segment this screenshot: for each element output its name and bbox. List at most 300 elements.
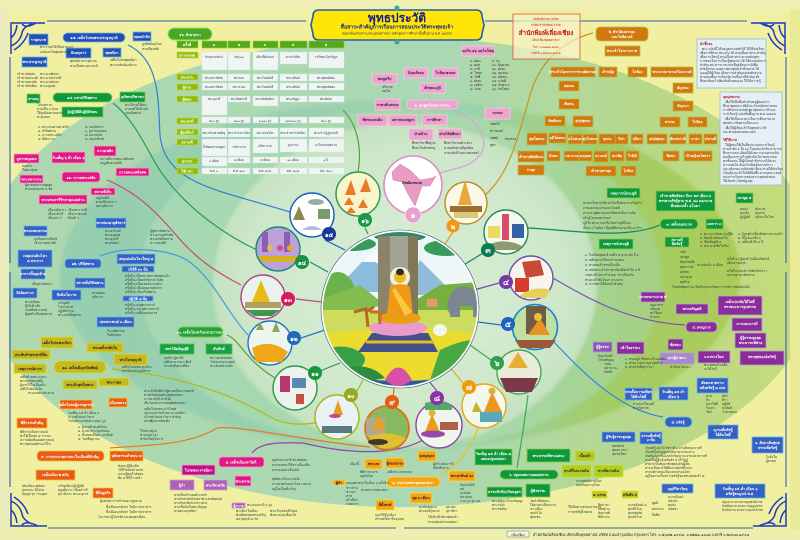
panel 8: magenta and lilac tree: ทรงทำศาสนกิจเหล่าพระสงฆ์เผยแผ่ — [174, 497, 222, 501]
panel 15: blue tree top left: พระราหุลได้เป็นสามเณร — [40, 43, 74, 50]
panel 3: dark green tree: ในสมัยพุทธกาล เป็นภิกษุแรกกับพระราชาธิราชอันดับหนึ่ง — [672, 283, 750, 290]
panel 13: magenta tree: สถูปเจดีย์ — [96, 196, 109, 200]
panel 10: green tree by medallion 12: พระวินัยบัญญัติ — [165, 346, 189, 352]
panel 6: green tree bottom right: ทางที่ไม่ควรเดิน — [564, 468, 590, 473]
panel 9: orange tree: เศรษฐีอนาถบิณฑิก — [144, 419, 170, 423]
panel 6: green tree bottom right: พระธรรมที่ทรงแสดง — [533, 453, 565, 458]
panel 2: orange family tree — [518, 27, 717, 176]
panel 9: orange tree: ตำบลอุรุเวลา — [140, 433, 158, 438]
panel 5: blue tree bottom right: ธีร — [706, 398, 710, 402]
panel 6: green tree bottom right: พบธรรม — [652, 507, 664, 511]
panel 15: blue tree top left: ทรงเตือนสติ — [142, 46, 159, 51]
panel 11: olive tree: ทรงโปรดรับนมัสการ — [122, 368, 151, 373]
panel 7: amber tree: ทูต ๓ เดือน — [412, 495, 430, 501]
panel 9: orange tree: เสด็จโปรดพระเจ้าโกศล — [144, 405, 176, 411]
panel 7: amber tree: ได้เข้าเฝ้าพระพุทธเจ้า — [427, 515, 458, 520]
heading: section 16 — [168, 28, 212, 40]
panel 4: purple tree: เสด็จประทับใต้โพธิ์ — [725, 298, 756, 304]
panel 15: blue tree top left: ลูกศิษย์อนุโลม — [142, 41, 162, 47]
panel 2: orange family tree: เจ้าชายราหุล — [591, 168, 611, 174]
panel 5: blue tree bottom right: พุทธมามกะ — [612, 448, 628, 453]
panel 6: green tree bottom right: มรรคมีองค์ ๘ — [628, 503, 647, 507]
panel 6: green tree bottom right: ให้เห็นทางสายกลางชนะ — [568, 503, 602, 509]
panel 16: council table: พระเจ้ากาลาโศก — [228, 131, 250, 135]
panel 6: green tree bottom right: อริยสัจ ๔ — [623, 492, 637, 497]
panel 12: blue tree: พระอุบาลี — [105, 237, 118, 242]
panel 12: blue tree: สวนมัลละ — [92, 291, 106, 295]
panel 8: magenta and lilac tree: ฟังเสียงเพลงสรรเสริญ — [236, 513, 266, 517]
panel 13: magenta tree: เมืองกุสินารา — [48, 207, 66, 213]
panel 12: blue tree: ในวงศ์ศากยะ — [107, 329, 126, 333]
panel 13: magenta tree: ปิปผลิ ๆ — [68, 216, 79, 221]
panel 4: purple tree: มารและบารมี — [736, 321, 758, 326]
panel 16: council table: ใช้เวลา — [181, 168, 193, 174]
panel 3: dark green tree: ๑. ในเมืองพุทธเจ้าเสด็จ ทรงประทับ ปี ๑ — [585, 251, 639, 258]
panel 9: orange tree — [17, 388, 194, 520]
panel 12: blue tree: ผู้สู่พระนิพพาน — [150, 229, 171, 233]
panel 11: olive tree: ทรงโปรดญาติ — [120, 357, 142, 363]
panel 7: amber tree: บอกให้รู้ถูกต้อง — [375, 513, 396, 517]
panel 1: pink topic tree: มหาชนบทสูตร — [392, 118, 414, 123]
panel 10: green tree by medallion 12 — [160, 327, 235, 368]
badge 13 — [281, 292, 295, 306]
panel 1: pink topic tree: แพศย์ — [490, 136, 498, 140]
note panel: objectives: การศึกษาตามหลักสูตรพุทธประวัติ และ — [723, 108, 776, 113]
panel 14: green tree: ๕. ปลงสังขาร — [85, 125, 104, 129]
note panel: objectives: ให้ผู้สอนใช้เป็นสื่อประกอบการเรียนรู้ — [725, 141, 775, 147]
panel 1: pink topic tree: กษัตริย์ — [490, 122, 500, 126]
panel 12: blue tree: ครั้งที่ ๓ เสด็จออกผนวช — [125, 309, 158, 315]
panel 15: blue tree top left: เจ้าชายเทวทัต — [17, 80, 37, 84]
panel 10: green tree by medallion 12: พระอินทร์เนรมิต — [210, 364, 233, 368]
panel 15: blue tree top left: พุทธดำรัส — [134, 34, 151, 40]
panel 12: blue tree: ครั้งที่ ๑ เมื่อพระสัมมาสัมพุทธเจ้า — [125, 273, 170, 279]
panel 5: blue tree bottom right: ธรรมจักรหมุนเป็นวงกลมรอบโลก — [645, 468, 690, 475]
badge 10 — [344, 388, 358, 402]
panel 2: orange family tree: กัญจนา — [677, 103, 689, 109]
panel 16: council table: ผู้ตอบ — [183, 96, 192, 102]
panel 11: olive tree: พระราหุล — [107, 380, 121, 386]
heading: section 15 — [63, 33, 125, 42]
panel 9: orange tree: เจริญเดือน ผู้ปฏิบัติ — [58, 483, 84, 488]
badge 13: ๑๓ — [284, 298, 292, 304]
panel 14: green tree: ให้ถูกต้องตามธรรม — [37, 111, 64, 115]
panel 3: dark green tree: ๒. มีรู้ตนเองถึง ๖ — [738, 236, 761, 240]
badge 8 — [430, 391, 444, 405]
panel 12: blue tree: พระสงฆ์ทั้งหลาย — [150, 236, 173, 241]
panel 10: green tree by medallion 12: ๑๐. เสด็จโปรดวันมหาปวารณา — [177, 328, 224, 334]
panel 8: magenta and lilac tree: พระเจ้าปเสนทิโกศล — [270, 508, 297, 513]
panel 16: council table: ๓ เดือน — [209, 158, 219, 163]
panel 16: council table: ผู้อุปถัมภ์ — [180, 130, 194, 136]
panel 11: olive tree: ผู้ยากไร้ในเมืองนั้น — [20, 382, 46, 387]
panel 14: green tree: ตามเป็น ๓ ส่วน — [37, 105, 59, 111]
panel 8: magenta and lilac tree: พระธิดาในเมือง — [236, 508, 258, 513]
panel 13: magenta tree: ตามเมืองต่าง ๆ — [96, 199, 117, 205]
panel 3: dark green tree: ครั้งที่ ๒ ทรงนิวาสพักชั่วคราว — [727, 268, 767, 273]
panel 7: amber tree: ชาวนา — [346, 490, 356, 494]
panel 7: amber tree: สร้างศรัทธาในชุมชน — [375, 517, 405, 522]
medallion 1: map of India: มัชฌิมชนบท — [402, 180, 423, 185]
panel 2: orange family tree: พระนางมายาเทวีและวงศ์ — [652, 69, 692, 74]
panel 3: dark green tree: ผลการ ๓ — [708, 222, 722, 226]
note panel: objectives: เพื่อให้ผู้เรียนเข้าใจพุทธประวัติ — [725, 125, 766, 131]
panel 16: council table: พระมหินท์ — [286, 76, 300, 80]
publisher stamp: บริษัท สำนักพิมพ์ จำกัด — [531, 23, 561, 27]
panel 12: blue tree: ไม่ประมาท — [57, 305, 73, 309]
panel 3: dark green tree: ที่ตรัสรู้ — [671, 241, 682, 247]
panel 12: blue tree: ปฏิบัติธรรม — [58, 309, 74, 313]
panel 3: dark green tree: ๓. ทรงพบเจ้าชายเมืองนั้น — [585, 262, 621, 267]
panel 15: blue tree top left: นันทกุมาร — [71, 50, 86, 56]
panel 6: green tree bottom right: พุทธชน — [530, 515, 541, 520]
note panel: introduction: คำสอนเพื่อการเรียนรู้ตามเนื้อหาที่สำคัญ ทั้ง — [700, 74, 760, 79]
panel 5: blue tree bottom right: วิตก — [706, 410, 712, 414]
panel 5: blue tree bottom right: หลังตรัสรู้ ๗ แห่ง — [700, 385, 726, 391]
heading: section 11 — [54, 361, 106, 373]
panel 9: orange tree: ที่มีอยู่จริง — [95, 490, 111, 496]
panel 2: orange family tree: เจ้าหญิง — [602, 69, 615, 75]
panel 7: amber tree: ผู้นำ — [336, 480, 342, 486]
heading: section 1 — [407, 100, 458, 109]
panel 5: blue tree bottom right: วันเพ็ญ ๑๕ ค่ำ เดือน ๖ — [722, 485, 758, 492]
panel 14: green tree: ก่อนนิพพาน — [125, 111, 142, 115]
panel 5: blue tree bottom right: ใต้ต้นโพธิ์ — [631, 394, 647, 399]
badge 7 — [462, 380, 476, 394]
panel 6: green tree bottom right: อธิษฐาน — [598, 507, 611, 511]
medallion 12 — [248, 321, 292, 365]
panel 2: orange family tree: อานนท์ — [595, 153, 607, 158]
panel 4: purple tree: ๑. ทรงอยู่ป่าลึกพระเจ้าแผ่นดิน — [625, 357, 667, 361]
panel 9: orange tree: ถวายเวฬุวัน สวนไผ่ — [144, 396, 171, 402]
badge 11: ๑๑ — [311, 372, 319, 378]
panel 16: council table: พระพุทธทัตตะ — [317, 76, 336, 81]
panel 12: blue tree: ถูกต้องตามที่ตรัส — [34, 236, 57, 241]
panel 4: purple tree: พระมารแพ้พ่าย — [739, 340, 762, 345]
panel 16: council table: จารึกพระไตรปิฎก — [315, 55, 338, 59]
panel 1: pink topic tree: ๑๓. อัสสกะ — [492, 75, 508, 79]
panel 2: orange family tree: สุทโธทนะ — [529, 136, 545, 142]
panel 16: council table: พระมหากัสสป — [205, 76, 223, 80]
panel 12: blue tree: ๘ ประการ — [27, 258, 43, 263]
panel 3: dark green tree: ๒. ปิดหน้าหนีออกไป — [700, 236, 728, 240]
panel 3: dark green tree: สุทธาวาส — [680, 265, 693, 270]
publisher logo and footer — [507, 531, 750, 538]
panel 3: dark green tree: ภูมิใจ พระมารดาถึงวันประสูติที่ ๑๕ — [583, 220, 631, 225]
panel 5: blue tree bottom right: อยู่ในธรรมเรื่องการตรัสรู้ของพระพุทธเจ้า ๕ — [645, 473, 705, 479]
panel 7: amber tree: ญาติกลุ่มแรก — [419, 505, 437, 510]
panel 3: dark green tree: ผู้ปฏิบัติ — [740, 215, 750, 219]
heading: section 5: ๕. ตรัสรู้ — [671, 420, 685, 426]
panel 16: council table: วัตถุ ๑๐ — [234, 55, 244, 60]
panel 10: green tree by medallion 12: ประทับยืนตรงที่นั่น — [164, 363, 190, 368]
note panel: objectives: ทุกขั้นตอน ให้ผู้เรียนทำกิจกรรมได้ตาม — [723, 158, 776, 164]
panel 13: magenta tree: ผู้ทรงคุณธรรมสูงสุด — [25, 183, 52, 188]
medallion 13 — [241, 275, 285, 319]
panel 16: council table: พระอริฏฐะ — [286, 97, 300, 101]
panel 12: blue tree: พระสุภัททะ — [25, 300, 41, 305]
badge 2: ๒ — [451, 224, 456, 231]
badge 9: ๙ — [389, 398, 395, 407]
medallion 10 — [315, 395, 359, 439]
panel 5: blue tree bottom right: ๑. สัมมาสัมพุทธ — [755, 440, 781, 446]
panel 9: orange tree: เดินเดือน สุทัตตะ — [22, 483, 46, 489]
panel 6: green tree bottom right: วันเพ็ญ ๑๕ ค่ำ เดือน ๘ — [476, 450, 511, 457]
panel 7: amber tree: ที่นับถือมาก — [433, 465, 449, 470]
panel 1: pink topic tree: ๓. กาสี — [470, 67, 480, 71]
panel 9: orange tree: ณ เวฬุวันมหาวิหาร — [68, 414, 95, 420]
note panel: objectives: พุทธประวัติอย่างเป็นระบบ — [723, 119, 758, 126]
heading: section 9 — [37, 451, 104, 461]
panel 9: orange tree: ผู้แต่งพระราชกำหนด กฎหมาย — [100, 499, 142, 503]
panel 16: council table: พระพุทธทัตตะ — [317, 85, 336, 90]
panel 3: dark green tree: เมืองราชคฤห์ — [727, 260, 746, 265]
panel 13: magenta tree: ถวายเพลิง — [97, 148, 113, 153]
panel 15: blue tree top left: เจ้าชายกิมพิละ — [17, 84, 38, 88]
panel 15: blue tree top left: เจ้าชายนันทะ — [17, 72, 36, 76]
panel 16: council table: พระเจ้าอชาตศัตรู — [203, 131, 226, 135]
panel 11: olive tree: เหตุการณ์ต่างๆ — [18, 366, 42, 372]
medallion 11 — [273, 366, 317, 410]
panel 6: green tree bottom right: ทุกขนิโรธ — [628, 514, 642, 520]
panel 12: blue tree: พระอานนท์ — [105, 229, 121, 233]
panel 5: blue tree bottom right: พุทธพจน์ — [612, 444, 625, 449]
panel 4: purple tree: ผู้รู้ธรรมสูงสุด — [740, 335, 762, 341]
panel 16: council table: อาโลกเลณสถาน — [315, 143, 337, 147]
heading: section 7 — [387, 477, 440, 487]
panel 2: orange family tree: ชยเสน — [564, 84, 575, 88]
panel 12: blue tree: ปฏิบัติ ๘ ข้อ — [129, 296, 147, 302]
panel 15: blue tree top left — [17, 32, 162, 89]
panel 16: council table: ถ้ำสัตตบรรณคูหา — [203, 144, 226, 149]
note panel: introduction: สำคัญ พระสาวก ทรงบำเพ็ญเพียรบารมีเพื่อ — [700, 61, 758, 67]
panel 11: olive tree: เสด็จโปรดพระญาติ ๓ — [122, 363, 152, 369]
panel 3: dark green tree: คนตาย — [755, 211, 765, 215]
panel 14: green tree: ๒. ปรินิพพาน — [38, 129, 57, 133]
heading: section 1: ๑. ชมพูทวีปและวรรณะ — [415, 102, 450, 108]
panel 1: pink topic tree: ตามหลักฐานที่ถูกต้อง — [444, 145, 474, 150]
note panel: objectives: เรียนรู้และเข้าใจได้ดียิ่งขึ้น ตามจุดประสงค์ — [723, 170, 781, 176]
panel 1: pink topic tree: การศึกษา — [427, 117, 442, 122]
panel 1: pink topic tree: ๒. มคธ — [470, 63, 480, 67]
note panel: objectives: ศึกษาพุทธประวัติมีประโยชน์ต่อการสอน — [723, 103, 778, 109]
panel 9: orange tree: ศีล ๕ ปีนี้ก้าวหน้า — [118, 475, 142, 480]
panel 15: blue tree top left: พระประยูรญาติ — [23, 59, 47, 65]
note panel: objectives: ของการเรียนการสอนสาระพุทธศาสนา — [723, 175, 776, 180]
panel 6: green tree bottom right: ศีลมาลา — [598, 503, 610, 507]
panel 9: orange tree: ๓. ทั้งหมดเป็นพระอรหันต์ — [78, 431, 113, 437]
panel 7: amber tree: ชาวบ้าน — [346, 486, 359, 490]
panel 8: magenta and lilac tree: ผู้ถวาย — [233, 503, 244, 509]
panel 2: orange family tree: ธโตทนะ — [568, 136, 582, 141]
panel 7: amber tree: รวม ๖๐ รูป ๑๒ — [460, 499, 480, 503]
medallion 8 — [416, 401, 462, 448]
panel 3: dark green tree: คนเจ็บ — [740, 209, 749, 215]
badge 5 — [501, 317, 515, 331]
panel 3: dark green tree: นักบวช — [755, 207, 766, 211]
heading: section 2 — [596, 27, 648, 41]
panel 16: council table: พ.ศ. ๔๓๓ — [320, 169, 332, 173]
note panel: introduction: เพื่อการเรียนรู้ สรุปเนื้อหาสาระตามหลักสูตร — [700, 54, 760, 60]
center illustration: Buddha under the bodhi tree — [320, 230, 482, 392]
panel 9: orange tree: แห่งกรุงสาวัตถี พระนางมัลลิกา — [144, 411, 186, 416]
panel 1: pink topic tree: ๖. มัลละ — [470, 79, 482, 83]
panel 6: green tree bottom right: พิธีกรรม — [598, 515, 610, 519]
panel 4: purple tree: โกณฑัญญะ — [598, 357, 615, 362]
panel 2: orange family tree: สีหหนุ — [563, 101, 574, 107]
panel 16: council table: เดียรถีย์ปลอม — [256, 55, 274, 59]
panel 5: blue tree bottom right: ทรงหายใจเองมี — [633, 402, 654, 406]
panel 12: blue tree: ครั้งที่ ๕ เมื่อปรินิพพาน — [125, 289, 157, 294]
note panel: introduction: คำชี้แจง — [700, 40, 713, 46]
panel 9: orange tree: เป็นวัดแห่งแรกของพุทธศาสนา — [144, 399, 186, 406]
panel 16: council table — [168, 28, 344, 174]
panel 12: blue tree: ปัจฉิมโอวาท — [57, 292, 77, 297]
panel 5: blue tree bottom right: ญาณที่ตรัสรู้ — [713, 427, 733, 433]
panel 5: blue tree bottom right: ทรงตั้งความเพียร — [625, 388, 652, 394]
panel 15: blue tree top left: พระนางนันทา — [40, 80, 60, 84]
panel 14: green tree: สาเหตุ — [28, 97, 39, 102]
panel 1: pink topic tree: ๔. โกศล — [470, 70, 482, 75]
panel 16: council table: ๑ — [213, 43, 216, 47]
panel 4: purple tree: ทรงเจริญสติ — [683, 306, 702, 312]
panel 12: blue tree: ทรงปลงอายุสังขาร — [97, 220, 126, 226]
panel 15: blue tree top left: เจ้าชายอานนท์ — [17, 76, 38, 80]
panel 2: orange family tree: โกลิยะ — [631, 69, 643, 74]
panel 16: council table: ๗๐๐ รูป — [234, 119, 244, 123]
panel 12: blue tree — [13, 218, 174, 338]
panel 16: council table: ๑๐ เดือน — [287, 157, 299, 162]
panel 1: pink topic tree: ๑. อังคะ — [470, 59, 481, 63]
panel 2: orange family tree: เจ้าชายสิทธัตถะ — [518, 154, 544, 159]
medallion 3 — [484, 210, 528, 254]
panel 5: blue tree bottom right: มรรคมีองค์ — [668, 495, 683, 499]
medallion 2 — [445, 180, 487, 224]
panel 3: dark green tree: เดือน ๖ ไปยังป่า ที่ลุมพินีสวนเขาเป็น ๗ ก้าว — [583, 224, 642, 231]
medallion 7 — [462, 384, 506, 428]
panel 7: amber tree: พิธีกรรมบวช — [360, 470, 378, 474]
panel 9: orange tree: พระเจ้าพิมพิสารผู้ครองเมืองราชคฤห์ — [144, 388, 194, 393]
note panel: introduction: ศึกษาค้นคว้าเพิ่มเติมด้วยตนเอง ให้ได้ความรู้ — [700, 78, 761, 83]
badge 12: ๑๒ — [290, 337, 298, 343]
panel 14: green tree: สุภัททปริพาชก — [121, 94, 144, 100]
panel 15: blue tree top left: องค์แรกในพุทธศาสนา — [40, 50, 71, 55]
panel 13: magenta tree: ถวายพระเพลิงศพ — [119, 170, 146, 174]
badge 2 — [446, 220, 460, 232]
panel 11: olive tree — [12, 337, 152, 395]
title plaque — [311, 6, 484, 44]
heading: section 4 — [686, 322, 717, 332]
panel 5: blue tree bottom right: เดือน ๖ — [668, 394, 680, 399]
panel 16: council table: ประธาน — [181, 74, 194, 80]
heading: section 6 — [500, 470, 558, 479]
panel 12: blue tree: สถานที่ปรินิพพาน — [76, 280, 104, 285]
note panel: introduction: การสอนในการเรียนรู้พุทธประวัติ ได้ตามหลักการ — [700, 59, 767, 64]
panel 4: purple tree: ทรงทรมานกาย ๔ — [639, 295, 667, 299]
panel 16: council table: ครั้งที่ — [183, 41, 192, 47]
panel 14: green tree: ผู้ปฏิบัติดีปฏิบัติชอบ — [68, 109, 98, 115]
panel 5: blue tree bottom right: เกิดปัญญาเห็นอาสวักขยญาณ ยามปลายราตรี — [645, 452, 707, 458]
heading: section 7: ๗. ประกาศพระพุทธศาสนา — [392, 480, 434, 486]
panel 5: blue tree bottom right: ริ่มธุระ — [706, 405, 715, 411]
panel 4: purple tree: วัปปะ — [604, 362, 612, 366]
panel 7: amber tree: อุบาสก — [446, 505, 456, 510]
panel 16: council table: พระโมคคัลลี — [257, 76, 273, 80]
panel 5: blue tree bottom right: ปฏิบัติ — [722, 402, 730, 406]
panel 4: purple tree: แนวทางใหม่ — [704, 354, 724, 359]
panel 12: blue tree: เจริญสติ — [58, 301, 69, 305]
panel 7: amber tree: ญาติยส — [460, 491, 470, 495]
panel 10: green tree by medallion 12: เสด็จลงจากดาวดึงส์ — [164, 358, 191, 364]
panel 7: amber tree — [333, 451, 480, 524]
badge 8: ๘ — [434, 394, 440, 403]
panel 2: orange family tree: สิทธัตถะ — [548, 118, 562, 123]
panel 10: green tree by medallion 12: ฤทธิ์ปาฏิหาริย์ — [164, 355, 184, 360]
medallion 1: map of India — [384, 156, 442, 214]
panel 12: blue tree: ปาวาลเจดีย์ — [150, 241, 166, 245]
panel 16: council table: ผู้ถาม — [183, 84, 192, 90]
panel 2: orange family tree: พระเจ้าโอกกากราช — [607, 48, 638, 53]
panel 9: orange tree: ทำให้เป็นชน ๔ วรรณะ — [20, 432, 52, 438]
panel 9: orange tree: หลักธรรมคำสอน ๔ — [111, 453, 142, 458]
panel 16: council table: พระยสะ — [234, 76, 245, 80]
badge 7: ๗ — [466, 383, 472, 392]
panel 13: magenta tree: ทรงมอบหมาย ๓ ข้อ — [25, 187, 52, 191]
panel 6: green tree bottom right: ถือศีล — [652, 512, 660, 517]
note panel: objectives: ความสนใจ ค้นคว้าเพิ่มเติมจากตำรา — [723, 162, 773, 167]
panel 11: olive tree: ทรงเสด็จกลับไป — [93, 344, 118, 350]
panel 7: amber tree: สหายยส — [460, 495, 472, 499]
panel 2: orange family tree: อมิโตทนะ — [550, 135, 565, 140]
panel 2: orange family tree: อนุรุทธ — [580, 154, 592, 159]
panel 1: pink topic tree: ภาษาสันสกฤต — [376, 102, 399, 107]
panel 14: green tree: โปรดสาวก — [37, 102, 52, 107]
panel 12: blue tree: พระสงฆ์ทั้งหลาย — [58, 312, 81, 317]
panel 16: council table: พระมัชฌันติกะ — [255, 97, 275, 101]
panel 3: dark green tree: ทรงตกใจตามวิถีแห่งโลกถึงสังขารเจริญก้าว — [583, 200, 643, 205]
panel 12: blue tree: พระกัสสป — [105, 241, 118, 245]
panel 8: magenta and lilac tree: ธรรมเทศนาเรื่องจิต — [272, 467, 299, 472]
panel 12: blue tree: ครั้งที่ ๓ เมื่อแสดงธรรมจักร — [125, 281, 162, 286]
panel 3: dark green tree: กบิล — [680, 250, 686, 254]
panel 9: orange tree: ๔. วันเพ็ญมาฆะ — [78, 435, 100, 441]
panel 9: orange tree: เสด็จโปรดผู้บรรลุธรรม — [58, 401, 94, 408]
panel 14: green tree — [27, 92, 149, 142]
panel 12: blue tree: เหตุแผ่นดินไหวใหญ่ ๘ — [119, 256, 154, 262]
panel 1: pink topic tree: ๑๕. คันธาระ — [492, 83, 510, 87]
panel 2: orange family tree: กิสา — [617, 136, 625, 141]
medallion 4 — [509, 256, 553, 300]
panel 16: council table: ๘ เดือน — [234, 157, 244, 162]
panel 1: pink topic tree — [358, 46, 516, 155]
panel 7: amber tree: ที่ตั้งสงฆ์ — [378, 501, 392, 507]
panel 2: orange family tree: โกสิยะ — [622, 168, 634, 173]
panel 16: council table: พระสงฆ์ — [181, 118, 194, 124]
panel 16: council table: พระเจ้าเทวานัมปิยะ — [280, 131, 306, 135]
panel 4: purple tree: ปัญจวัคคีย์ — [598, 354, 613, 358]
panel 16: council table: ๔ — [292, 43, 295, 47]
title plaque: สอดคล้องกับสาระพระพุทธศาสนา หลักสูตรการศึกษาขั้นพื้นฐาน พ.ศ. ๒๕๔๔ — [342, 30, 452, 36]
panel 16: council table: พ.ศ. ๑๐๐ — [233, 169, 245, 173]
panel 13: magenta tree: เมืองพาราณสี — [68, 207, 87, 212]
panel 6: green tree bottom right: การตรัสรู้ทั้งหลาย — [568, 509, 592, 514]
panel 1: pink topic tree: ๑๔. อวันตี — [492, 79, 506, 83]
panel 13: magenta tree: เมืองราชคฤห์ — [68, 211, 86, 216]
panel 14: green tree: ๘. อนุปาทิเสส — [85, 137, 104, 142]
panel 5: blue tree bottom right: ปฐมยาม ทรงบรรลุบุพเพนิวาส — [722, 500, 762, 505]
panel 8: magenta and lilac tree: พระธรรม — [236, 480, 251, 484]
panel 1: pink topic tree: ๙. กุรุ — [492, 59, 500, 64]
